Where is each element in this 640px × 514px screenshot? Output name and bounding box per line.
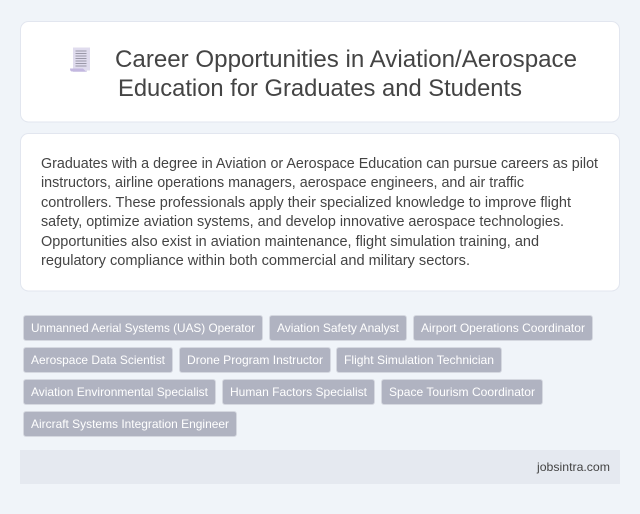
tag [270, 316, 406, 340]
footer bar [20, 450, 620, 484]
tag: Unmanned Aerial Systems (UAS) Operator [31, 321, 255, 335]
tag [180, 348, 330, 372]
career tags [24, 316, 592, 436]
title [115, 46, 577, 102]
header panel [20, 22, 620, 122]
tag: Drone Program Instructor [187, 353, 323, 367]
tag [24, 380, 216, 404]
title: Career Opportunities in Aviation/Aerospace [115, 46, 577, 73]
description text: regulatory compliance within both commercial and military sectors. [41, 253, 470, 269]
footer source: jobsintra.com [536, 460, 610, 474]
tag: Flight Simulation Technician [344, 353, 494, 367]
tag: Aviation Environmental Specialist [31, 385, 209, 399]
tag [336, 348, 502, 372]
tag [222, 380, 374, 404]
description text: Opportunities also exist in aviation maintenance, flight simulation training, and [41, 234, 539, 250]
tag [24, 348, 172, 372]
tag: Aviation Safety Analyst [277, 321, 400, 335]
tag: Human Factors Specialist [230, 385, 368, 399]
title: Education for Graduates and Students [118, 75, 522, 102]
tag [24, 412, 236, 436]
description text: safety, optimize aviation systems, and develop innovative aerospace technologies. [41, 214, 564, 230]
description text: controllers. These professionals apply their specialized knowledge to improve flight [41, 195, 571, 211]
tag [24, 316, 262, 340]
tag: Aerospace Data Scientist [31, 353, 166, 367]
description panel [20, 134, 620, 291]
description text [41, 156, 598, 269]
description text: Graduates with a degree in Aviation or Aerospace Education can pursue careers as pilot [41, 156, 598, 172]
icon: document scroll [70, 48, 90, 72]
description text: instructors, airline operations managers, aerospace engineers, and air traffic [41, 175, 524, 191]
tag: Aircraft Systems Integration Engineer [31, 417, 229, 431]
tag: Airport Operations Coordinator [421, 321, 585, 335]
tag: Space Tourism Coordinator [389, 385, 535, 399]
tag [414, 316, 592, 340]
tag [382, 380, 542, 404]
